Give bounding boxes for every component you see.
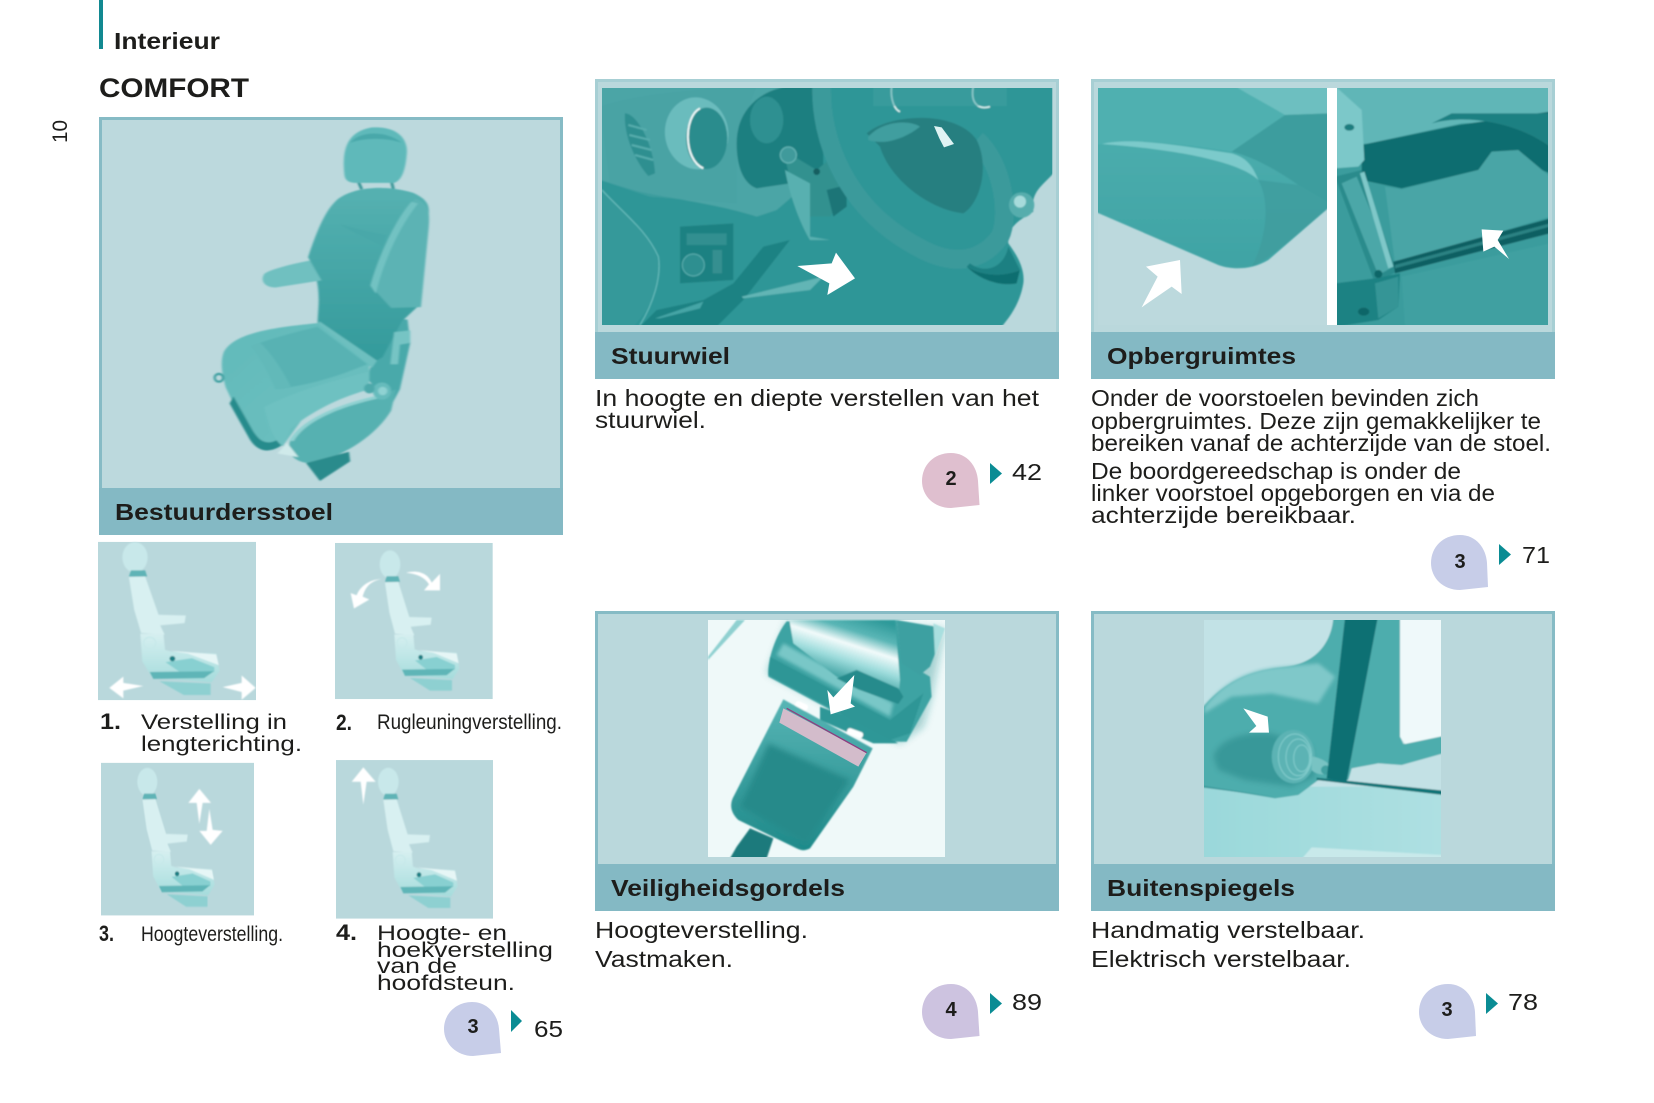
list item 2: 2. [336, 710, 352, 735]
arrow: mirror knob [1243, 708, 1269, 733]
text: Opbergruimtes [1091, 385, 1551, 528]
photo: storage frame [1335, 86, 1550, 327]
text: Stuurwiel: stuurwiel. [595, 407, 706, 433]
arrow: down [199, 809, 223, 845]
list item 3 [99, 921, 283, 946]
list item 3: Hoogteverstelling. [141, 923, 283, 946]
page reference: chapter 3 page 71 [1431, 535, 1550, 590]
page reference: chapter 2 page 42: 2 [945, 468, 957, 490]
text: Opbergruimtes: achterzijde bereikbaar. [1091, 502, 1356, 528]
arrow: backward [109, 677, 143, 698]
thumbnail 2: backrest adjustment [335, 543, 493, 699]
text: Buitenspiegels: Elektrisch verstelbaar. [1091, 946, 1351, 972]
arrow: recline forward [406, 572, 440, 590]
page reference: chapter 2 page 42: 42 [1012, 459, 1042, 485]
list item 1: Verstelling in [141, 711, 287, 734]
photo: seat cushion from below [1095, 86, 1337, 325]
text: Veiligheidsgordels: Vastmaken. [595, 946, 733, 972]
thumbnail 1: lengthwise adjustment [98, 542, 256, 700]
text: Stuurwiel: In hoogte en diepte verstellen van het [595, 385, 1040, 411]
panel: Stuurwiel [595, 80, 1059, 379]
list item 4: Hoogte- en [377, 922, 507, 945]
list item 4: hoofdsteun. [377, 972, 515, 995]
text: Opbergruimtes: linker voorstoel opgeborgen en via de [1091, 480, 1495, 506]
panel: Buitenspiegels [1091, 612, 1555, 911]
text: Veiligheidsgordels: Hoogteverstelling. [595, 917, 808, 943]
text: Veiligheidsgordels [595, 917, 808, 972]
arrow: storage latch [1482, 229, 1509, 259]
text: Opbergruimtes: De boordgereedschap is onder de [1091, 458, 1461, 484]
thumbnail 3: height adjustment [101, 763, 254, 915]
heading: Opbergruimtes: Opbergruimtes [1107, 343, 1296, 369]
illustration: driver seat [215, 127, 429, 481]
heading: Veiligheidsgordels: Veiligheidsgordels [611, 875, 845, 901]
list item 1 [100, 709, 302, 756]
page reference: chapter 3 page 78 [1419, 984, 1538, 1039]
photo: seat belt buckle [708, 620, 945, 858]
list item 4: van de [377, 955, 457, 978]
arrow: insert tongue [827, 675, 855, 714]
list item 4: 4. [336, 920, 357, 945]
list item 4 [336, 920, 553, 995]
list item 1: 1. [100, 709, 121, 734]
list item 2 [336, 710, 562, 735]
text: Opbergruimtes: opbergruimtes. Deze zijn gemakkelijker te [1091, 408, 1541, 434]
page reference: chapter 3 page 65 [444, 1002, 563, 1056]
page reference: chapter 4 page 89 [922, 984, 1042, 1039]
arrow: under-seat storage [1142, 260, 1182, 307]
list item 2: Rugleuningverstelling. [377, 711, 562, 734]
section tab: Interieur: Interieur [114, 28, 220, 54]
arrow: forward [223, 676, 256, 700]
page reference: chapter 3 page 65: 65 [534, 1016, 563, 1042]
heading: Stuurwiel: Stuurwiel [611, 343, 730, 369]
page reference: chapter 4 page 89: 4 [945, 999, 957, 1021]
page number: 10 [49, 120, 72, 143]
text: Opbergruimtes: bereiken vanaf de achterzijde van de stoel. [1091, 430, 1551, 456]
section tab: Interieur [99, 0, 220, 54]
panel: Bestuurdersstoel [99, 118, 563, 535]
title: COMFORT [99, 73, 250, 103]
illustration: steering column [600, 86, 1053, 327]
page reference: chapter 3 page 71: 3 [1454, 551, 1466, 573]
page reference: chapter 3 page 78: 78 [1508, 989, 1538, 1015]
list item 3: 3. [99, 921, 114, 946]
arrow: recline back [351, 579, 382, 609]
panel: Veiligheidsgordels [595, 612, 1059, 911]
text: Opbergruimtes: Onder de voorstoelen bevinden zich [1091, 385, 1479, 411]
arrow: up [188, 789, 211, 824]
logo: lion [934, 126, 954, 147]
heading: Bestuurdersstoel: Bestuurdersstoel [115, 499, 333, 525]
list item 1: lengterichting. [141, 733, 302, 756]
text: Buitenspiegels [1091, 917, 1365, 972]
page reference: chapter 2 page 42 [922, 453, 1042, 508]
heading: Buitenspiegels: Buitenspiegels [1107, 875, 1295, 901]
page reference: chapter 3 page 65: 3 [467, 1016, 479, 1038]
list item 4: hoekverstelling [377, 939, 553, 962]
page reference: chapter 4 page 89: 89 [1012, 989, 1042, 1015]
arrow: up [352, 767, 376, 805]
page reference: chapter 3 page 78: 3 [1441, 999, 1453, 1021]
thumbnail 4: headrest adjustment [336, 760, 493, 919]
arrow: steering lever [797, 253, 855, 295]
panel: Opbergruimtes [1091, 80, 1555, 379]
page reference: chapter 3 page 71: 71 [1522, 542, 1550, 568]
photo: mirror control [1202, 618, 1443, 859]
text: Stuurwiel [595, 385, 1040, 433]
text: Buitenspiegels: Handmatig verstelbaar. [1091, 917, 1365, 943]
